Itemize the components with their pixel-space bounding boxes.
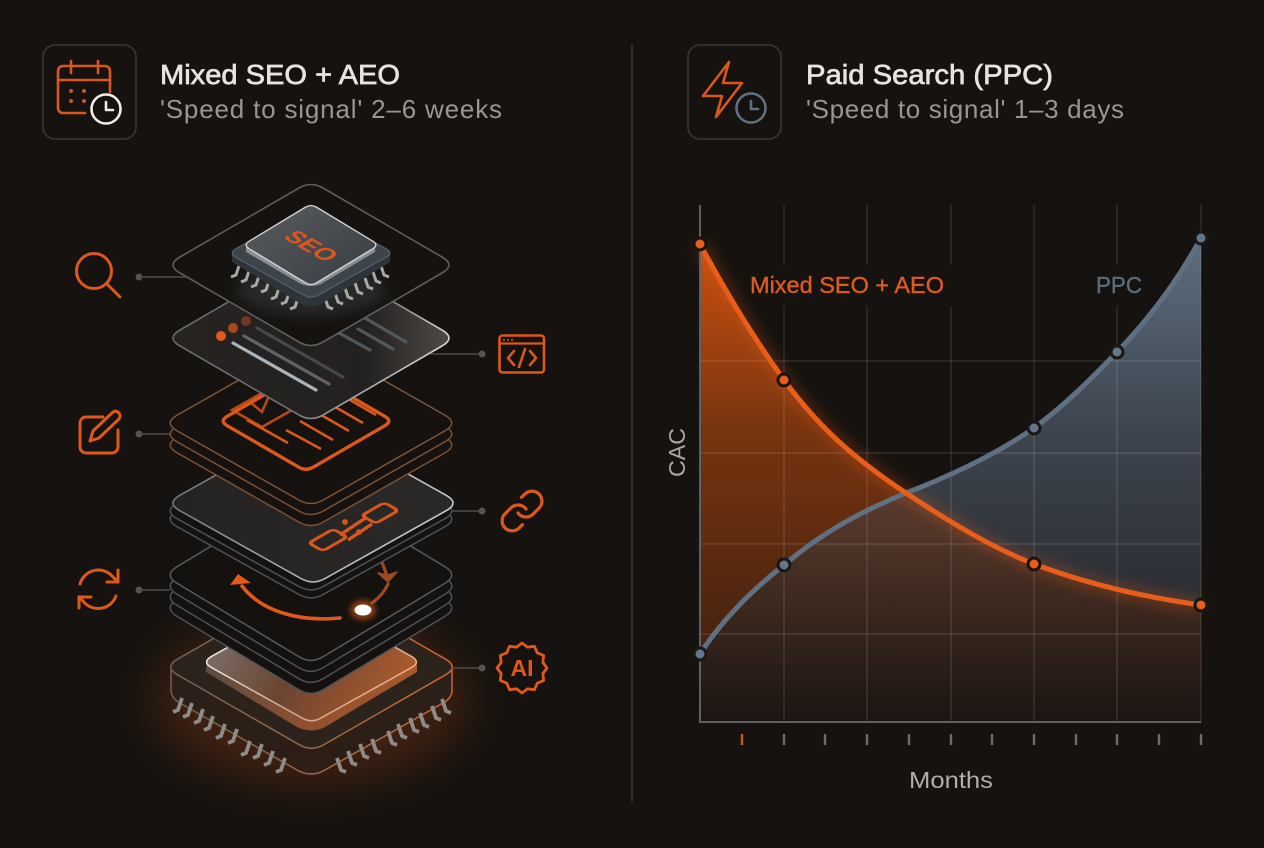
area: blue only (906, 238, 1201, 605)
chip glow (236, 264, 386, 316)
icon: bolt with clock (688, 45, 781, 139)
subtitle: speed to signal weeks: 'Speed to signal' 2–6 weeks (160, 94, 502, 124)
glowing inner slab (206, 662, 417, 730)
text lines (233, 318, 406, 390)
AI chip glow (153, 615, 469, 785)
cycle arrow (230, 562, 397, 620)
y axis label: CAC (664, 428, 690, 477)
callout: sync icon (79, 570, 170, 609)
axes (700, 205, 1201, 722)
callout: AI badge (452, 643, 547, 693)
callout: code window icon (430, 336, 544, 372)
orange curve glow (700, 244, 1201, 605)
chip pins (231, 266, 389, 309)
series label: PPC: PPC (1096, 272, 1142, 298)
layer: page/code plane (173, 258, 449, 418)
center divider (631, 45, 633, 802)
series label: Mixed SEO + AEO: Mixed SEO + AEO (750, 272, 944, 298)
x axis label: Months (909, 767, 993, 793)
callout: edit icon (80, 411, 170, 453)
chip glass top (246, 245, 375, 286)
title: Paid Search (PPC): Paid Search (PPC) (806, 59, 1053, 90)
markers: PPC (694, 232, 1207, 660)
layer: AI chip base (171, 586, 452, 774)
area: orange only (700, 244, 906, 654)
subtitle: speed to signal days: 'Speed to signal' 1–3 days (806, 94, 1124, 124)
callout: AI badge: AI (510, 655, 534, 681)
month ticks (742, 734, 1201, 745)
layer: sync stack (170, 490, 452, 693)
layered stack illustration (153, 184, 469, 785)
markers: Mixed SEO + AEO (694, 238, 1207, 611)
window dots (216, 316, 251, 341)
title: Mixed SEO + AEO: Mixed SEO + AEO (160, 59, 400, 90)
callout: link icon (452, 491, 542, 531)
layer: document stack (170, 342, 452, 526)
callout: search icon (76, 254, 187, 297)
icon: calendar with clock (43, 45, 136, 139)
document icon (223, 373, 389, 469)
label: SEO: SEO (277, 227, 344, 266)
chip base (232, 253, 390, 306)
right header: Paid Search (PPC) (688, 45, 1124, 139)
layer: link stack (170, 424, 453, 598)
chain icon (309, 502, 398, 551)
line: PPC (700, 238, 1201, 654)
area: overlap below both curves (700, 493, 1201, 722)
grid (700, 205, 1201, 722)
left header: Mixed SEO + AEO (43, 45, 502, 139)
layer: SEO plane with chip (173, 184, 449, 346)
chip pins (173, 698, 451, 772)
line: Mixed SEO + AEO (700, 244, 1201, 605)
chart: CAC over months (664, 205, 1207, 793)
